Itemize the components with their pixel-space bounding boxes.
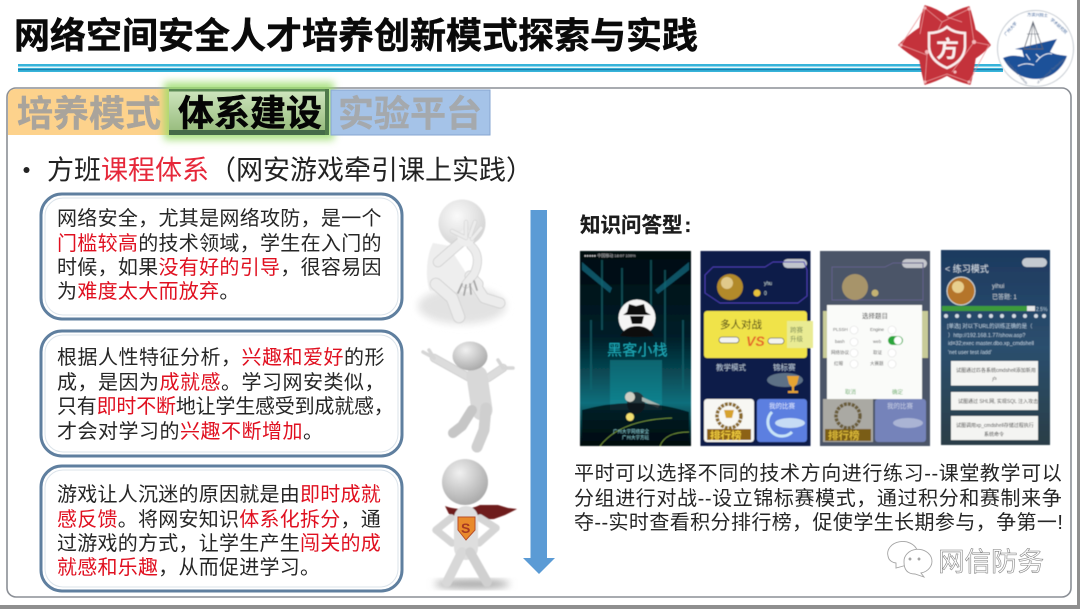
phone 3: 选择题目: 确定 — [892, 388, 904, 396]
arrow: downward progress — [523, 210, 555, 574]
text box: 兴趣与成就感: 才会对学习的兴趣不断增加。 — [57, 420, 324, 443]
phone 2: 主菜单: yhu — [764, 281, 772, 287]
phone 4: 练习模式: 试图通过匹各系统cmdshell添加新用 — [956, 367, 1036, 374]
description paragraph: 分组进行对战--设立锦标赛模式，通过积分和赛制来争 — [574, 487, 1062, 510]
phone 3: 选择题目: 排行榜 — [828, 429, 860, 442]
logo: red star shield — [899, 6, 990, 84]
text box: 入门困难: 为难度太大而放弃。 — [57, 280, 240, 303]
tab: 实验平台: 实验平台 — [338, 93, 482, 134]
text box: 兴趣与成就感: 成，是因为成就感。学习网安类似， — [57, 371, 385, 394]
description paragraph: 夺--实时查看积分排行榜，促使学生长期参与，争第一! — [574, 511, 1063, 534]
phone 1: 黑客小栈: ●●●●● 中国移动 18:07 100% — [584, 252, 636, 258]
phone 4: 练习模式: 已答题: 1 — [992, 293, 1017, 301]
tab: 体系建设: 体系建设 — [178, 92, 322, 134]
subheading: 方班课程体系（网安游戏牵引课上实践） — [47, 156, 533, 186]
phone 3: 选择题目: 取消 — [845, 388, 857, 396]
phone 4: 练习模式: yihui — [992, 284, 1004, 290]
phone 3: 选择题目: Engine — [870, 327, 885, 332]
phone 2: 主菜单: 锦标赛 — [773, 362, 796, 372]
phone 4: 练习模式: < 练习模式 — [945, 263, 989, 274]
phone 3: 选择题目 — [820, 251, 930, 446]
phone 2: 主菜单 — [700, 251, 813, 446]
phone 3: 选择题目: bash — [835, 339, 845, 344]
phone 2: 主菜单: 升级 — [790, 334, 804, 343]
figure: jumping person — [423, 342, 513, 447]
phone 4: 练习模式: 'net user test /add' — [948, 350, 992, 356]
text box: 入门困难: 网络安全，尤其是网络攻防，是一个 — [57, 207, 382, 230]
title underline — [18, 64, 1003, 72]
text box: 游戏化学习: 就感和乐趣，从而促进学习。 — [57, 556, 320, 579]
logo: university seal: Guangzhou Institute — [1005, 60, 1029, 85]
logo: university seal: 方滨兴院士 — [1027, 11, 1048, 19]
phone 3: 选择题目: 选择题目 — [862, 311, 888, 320]
phone 3: 选择题目: web — [873, 339, 882, 344]
phone 2: 主菜单: 多人对战 — [720, 318, 762, 331]
text box: 兴趣与成就感: 根据人性特征分析，兴趣和爱好的形 — [57, 346, 385, 369]
phone 4: 练习模式: id=32;exec master.dbo.xp_cmdshell — [948, 341, 1034, 347]
phone 4: 练习模式: 系统命令 — [984, 431, 1004, 438]
icon: wechat — [888, 542, 932, 577]
text box: 游戏化学习: 游戏让人沉迷的原因就是由即时成就 — [57, 483, 381, 506]
logo: university seal: 广州大学 — [1002, 20, 1019, 37]
title: 网络空间安全人才培养创新模式探索与实践 — [14, 15, 698, 56]
phone 4: 练习模式: 2.5% — [1036, 307, 1048, 313]
text box: 游戏化学习: 感反馈。将网安知识体系化拆分，通 — [57, 508, 381, 531]
phone 4: 练习模式: [单选] 对以下URL的训练正确的是（ — [947, 322, 1033, 330]
text box: 兴趣与成就感 — [41, 331, 402, 456]
phone 2: 主菜单: 排行榜 — [710, 429, 742, 442]
tab glow — [164, 82, 334, 140]
phone 3: 选择题目: 我的比赛 — [887, 401, 914, 410]
phone 1: 黑客小栈: 黑客小栈 — [607, 342, 668, 359]
phone 3: 选择题目: 网络协议 — [831, 349, 849, 356]
phone 3: 选择题目: 大赛题 — [870, 360, 884, 367]
logo: university seal — [998, 10, 1074, 86]
phone 1: 黑客小栈 — [580, 251, 691, 446]
logo: red star shield: 方 — [936, 36, 959, 62]
phone 4: 练习模式 — [941, 250, 1050, 445]
watermark: 网信防务 — [888, 542, 1044, 577]
phone 4: 练习模式: 试图调用xp_cmdshell存储过程执行 — [956, 422, 1034, 429]
phone 3: 选择题目: PLSSH — [833, 327, 848, 332]
logo: university seal: 学术研究院 — [1049, 16, 1070, 36]
figure: superhero person: S — [461, 520, 470, 536]
phone 2: 主菜单: VS — [746, 333, 765, 349]
tab: 培养模式: 培养模式 — [17, 93, 161, 134]
text box: 游戏化学习 — [41, 466, 402, 591]
phone 4: 练习模式: 试图通过 SHL网, 实现SQL 注入攻击 — [958, 398, 1038, 405]
phone 3: 选择题目: 红帽 — [834, 360, 843, 367]
hacker icon — [618, 300, 656, 337]
watermark: 网信防务: 网信防务 — [938, 547, 1044, 577]
phone 4: 练习模式: ）http://192.168.1.77/show.asp? — [948, 332, 1025, 339]
phone 4: 练习模式: 户 — [992, 376, 997, 383]
heading: 知识问答型: 知识问答型: — [580, 214, 691, 237]
phone 1: 黑客小栈: 广州大学方班 — [622, 434, 649, 441]
phone 2: 主菜单: 跨赛 — [790, 325, 804, 334]
figure: frustrated person — [418, 200, 506, 324]
phone 1: 黑客小栈: 广州大学网络安全 — [613, 428, 649, 435]
phone 2: 主菜单: 0 — [764, 291, 767, 297]
text box: 入门困难: 门槛较高的技术领域，学生在入门的 — [57, 232, 382, 255]
description paragraph: 平时可以选择不同的技术方向进行练习--课堂教学可以 — [574, 462, 1062, 485]
figure: superhero person — [434, 459, 517, 588]
text box: 兴趣与成就感: 只有即时不断地让学生感受到成就感， — [57, 395, 394, 418]
logo: university seal: of Advanced Technology — [1036, 57, 1066, 85]
tabs — [8, 82, 490, 140]
text box: 游戏化学习: 过游戏的方式，让学生产生闯关的成 — [57, 532, 381, 555]
description paragraph — [574, 462, 1063, 534]
text box: 入门困难: 时候，如果没有好的引导，很容易因 — [57, 256, 382, 279]
phone 2: 主菜单: 我的比赛 — [769, 401, 796, 410]
phone 3: 选择题目: 取证 — [873, 349, 882, 356]
phone 2: 主菜单: 教学模式 — [716, 362, 746, 372]
text box: 入门困难 — [41, 194, 402, 319]
